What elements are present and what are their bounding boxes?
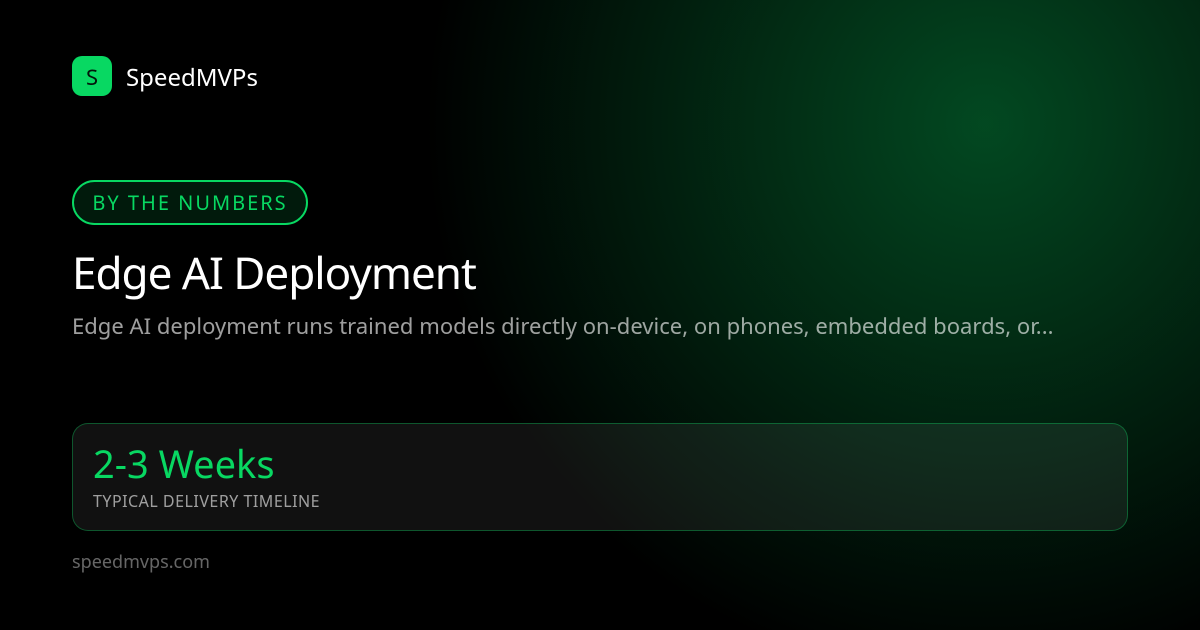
stat card xyxy=(72,423,1128,531)
icon: S logo tile: S xyxy=(86,62,98,92)
brand name: SpeedMVPs xyxy=(126,61,258,94)
subtitle: Edge AI deployment runs trained models directly on-device, on phones, embedded boards, or... xyxy=(72,311,1054,341)
brand logo xyxy=(72,56,258,96)
footer url: speedmvps.com xyxy=(72,550,210,574)
title: Edge AI Deployment xyxy=(72,242,476,302)
stat value: 2-3 Weeks xyxy=(93,438,275,490)
stat label: TYPICAL DELIVERY TIMELINE xyxy=(93,490,320,512)
badge: by the numbers: BY THE NUMBERS xyxy=(92,189,288,216)
badge: by the numbers xyxy=(72,180,308,225)
icon: S logo tile xyxy=(72,56,112,96)
